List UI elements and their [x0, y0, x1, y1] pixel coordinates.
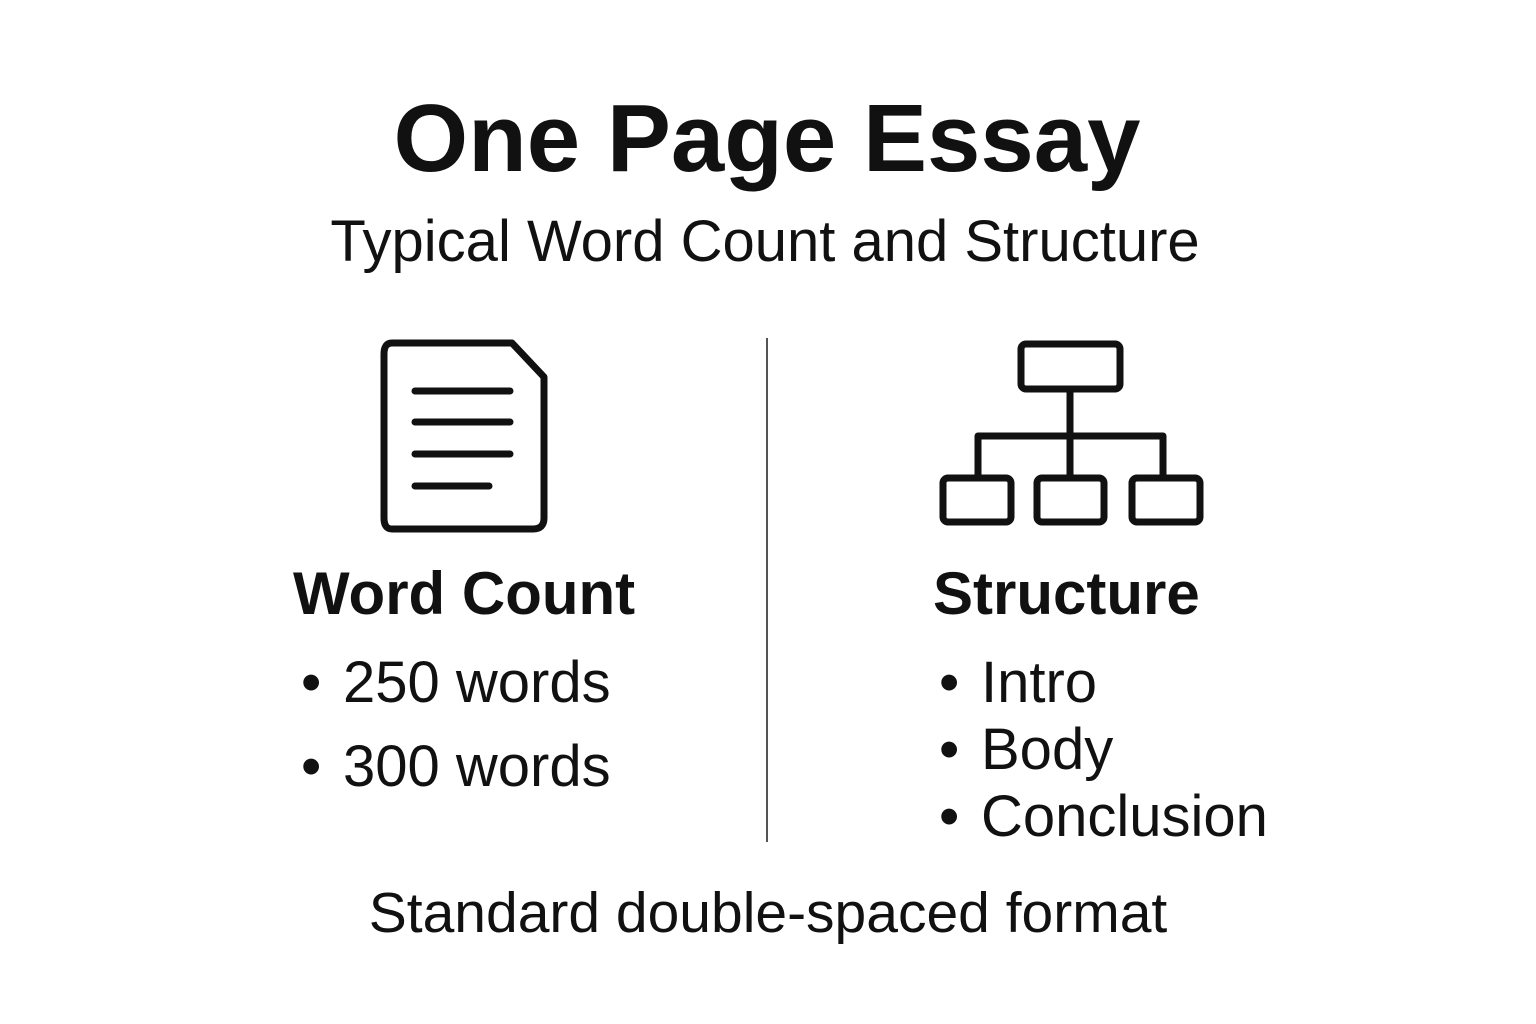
- icon: hierarchy: [940, 340, 1204, 526]
- panel: structure: •: [939, 650, 959, 715]
- bullet: intro: Intro: [981, 650, 1097, 715]
- icon: document: [380, 340, 548, 532]
- heading: word count: Word Count: [293, 560, 635, 627]
- panel: structure: [933, 560, 1268, 849]
- bullet: body: Body: [981, 717, 1113, 782]
- bullet: 300 words: 300 words: [343, 734, 611, 799]
- bullet: 250 words: 250 words: [343, 650, 611, 715]
- panel: word count: •: [301, 650, 321, 715]
- heading: structure: Structure: [933, 560, 1200, 627]
- panel: word count: •: [301, 734, 321, 799]
- panel: structure: •: [939, 717, 959, 782]
- title: One Page Essay: [393, 85, 1141, 192]
- panel: structure: •: [939, 784, 959, 849]
- panel: word count: [293, 560, 635, 799]
- footer note: Standard double-spaced format: [369, 881, 1167, 945]
- divider: [766, 338, 768, 842]
- bullet: conclusion: Conclusion: [981, 784, 1268, 849]
- subtitle: Typical Word Count and Structure: [330, 209, 1200, 274]
